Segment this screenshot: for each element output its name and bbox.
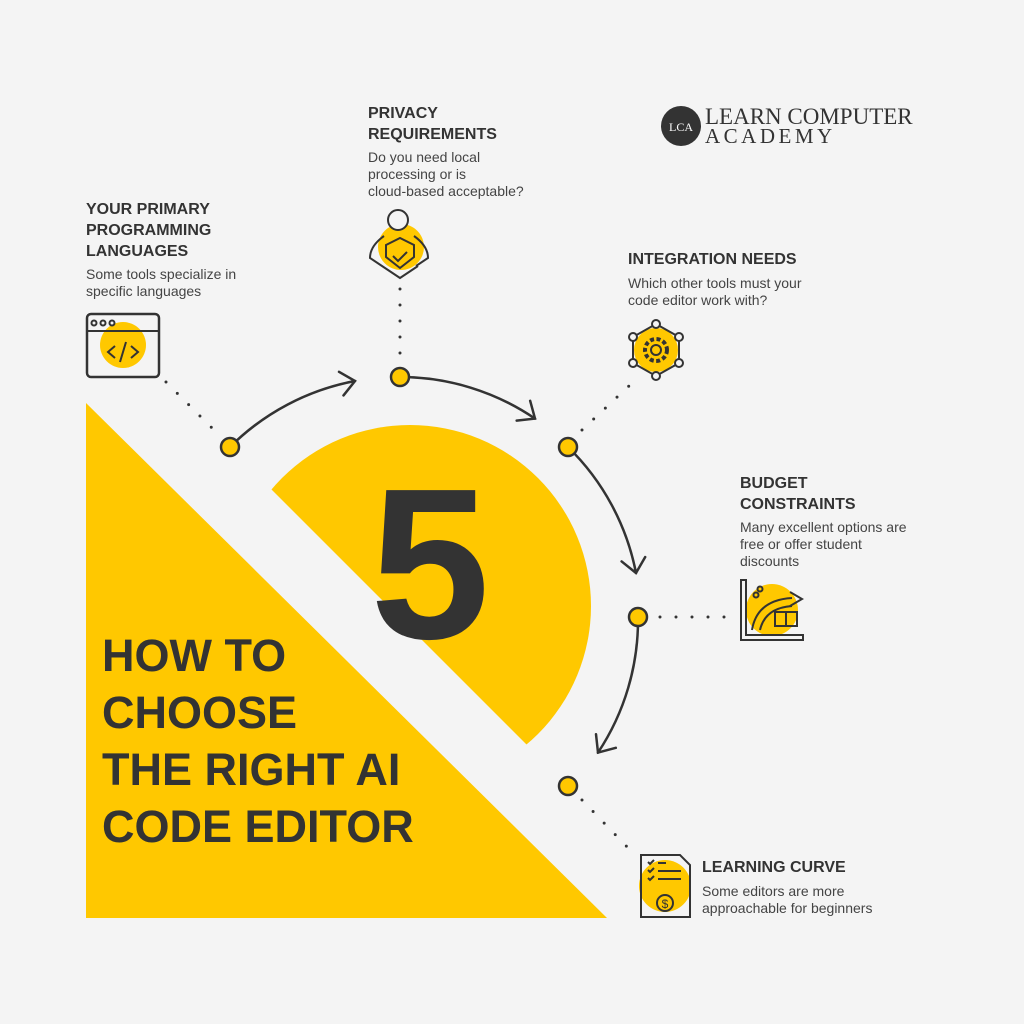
item: budget: CONSTRAINTS	[740, 496, 856, 513]
dots	[221, 368, 647, 795]
logo: LCA	[669, 120, 693, 134]
icon: code window	[87, 314, 159, 377]
icon: shield person	[370, 210, 428, 278]
item: learning curve: Some editors are more	[702, 883, 845, 899]
title: CODE EDITOR	[102, 801, 414, 852]
item: languages: PROGRAMMING	[86, 222, 211, 239]
logo: LEARN COMPUTER	[705, 104, 913, 129]
title: HOW TO	[102, 630, 286, 681]
item: integration: INTEGRATION NEEDS	[628, 251, 797, 268]
title	[102, 630, 414, 852]
half circle	[272, 425, 591, 744]
icon: checklist doc: $	[662, 897, 669, 911]
item: languages: YOUR PRIMARY	[86, 201, 210, 218]
item: integration	[628, 251, 802, 308]
icon: gear network	[629, 320, 683, 380]
yellow triangle	[86, 403, 607, 918]
arrow path	[230, 369, 648, 759]
item: integration: Which other tools must your	[628, 275, 802, 291]
item: privacy: cloud-based acceptable?	[368, 183, 524, 199]
item: languages: LANGUAGES	[86, 243, 189, 260]
item: languages: specific languages	[86, 283, 201, 299]
item: budget: free or offer student	[740, 536, 862, 552]
item: privacy	[368, 105, 524, 199]
title: CHOOSE	[102, 687, 297, 738]
item: languages	[86, 201, 236, 299]
item: privacy: REQUIREMENTS	[368, 126, 497, 143]
logo: ACADEMY	[705, 124, 836, 148]
logo	[661, 104, 913, 148]
item: privacy: processing or is	[368, 166, 466, 182]
item: privacy: PRIVACY	[368, 105, 438, 122]
item: learning curve	[702, 859, 872, 916]
item: budget: BUDGET	[740, 475, 808, 492]
icon: chart book	[741, 580, 803, 640]
item: learning curve: approachable for beginners	[702, 900, 872, 916]
item: budget	[740, 475, 907, 569]
dotted connectors	[166, 289, 730, 850]
title: THE RIGHT AI	[102, 744, 400, 795]
item: languages: Some tools specialize in	[86, 266, 236, 282]
number 5: 5	[370, 443, 490, 684]
icon: checklist doc	[639, 855, 691, 917]
item: privacy: Do you need local	[368, 149, 480, 165]
item: budget: Many excellent options are	[740, 519, 907, 535]
item: learning curve: LEARNING CURVE	[702, 859, 846, 876]
item: budget: discounts	[740, 553, 799, 569]
item: integration: code editor work with?	[628, 292, 768, 308]
